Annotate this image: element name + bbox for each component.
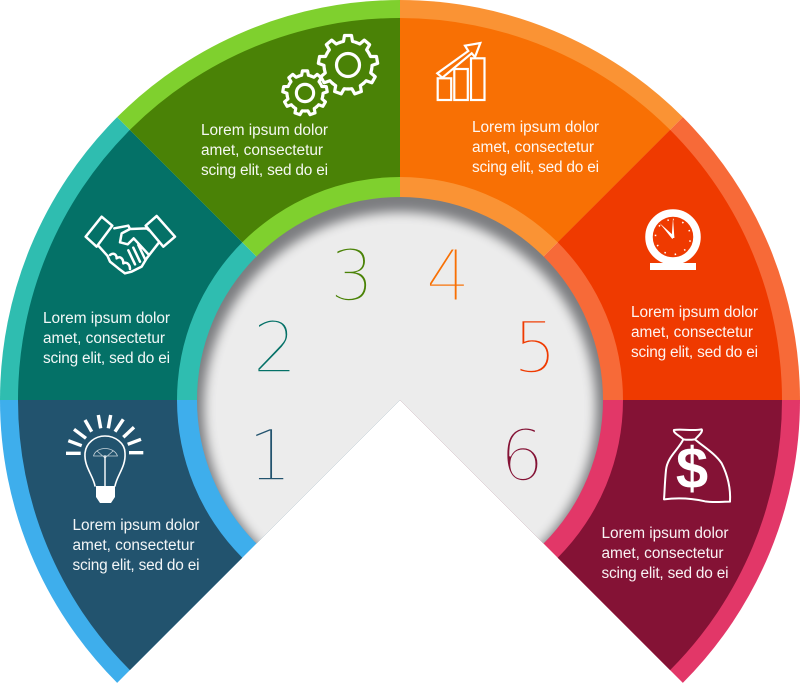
text: teal segment description	[43, 310, 170, 367]
panel 6: maroon segment	[400, 400, 800, 683]
center disc with inner shadow	[197, 197, 603, 544]
text: orange segment description: amet, consectetur	[472, 139, 594, 156]
text: blue segment description: amet, consectetur	[72, 537, 194, 554]
text: blue segment description	[72, 517, 200, 574]
text: red segment description: scing elit, sed do ei	[631, 344, 758, 361]
text: teal segment description: Lorem ipsum dolor	[43, 310, 170, 327]
icon: rising bar chart	[437, 43, 484, 100]
text: orange segment description: scing elit, sed do ei	[472, 159, 599, 176]
text: teal segment description: amet, consectetur	[43, 330, 165, 347]
text: teal segment description: scing elit, sed do ei	[43, 350, 170, 367]
number 2: 2	[253, 307, 297, 389]
numbers on center disc	[248, 235, 557, 497]
panel 5: red segment	[400, 117, 800, 400]
panel 2: teal segment	[0, 117, 400, 400]
number 1: 1	[248, 415, 292, 497]
icon: gears	[282, 36, 378, 116]
text: maroon segment description: scing elit, sed do ei	[602, 565, 728, 582]
text: green segment description: amet, consectetur	[201, 142, 323, 159]
text: maroon segment description: Lorem ipsum dolor	[602, 525, 728, 542]
icon: money bag: $	[676, 436, 708, 501]
panel 1: blue segment	[0, 400, 400, 683]
text: green segment description: Lorem ipsum dolor	[201, 122, 328, 139]
panel 4: orange segment	[400, 0, 683, 400]
icon: desk clock	[649, 213, 697, 270]
text: blue segment description: scing elit, sed do ei	[72, 557, 200, 574]
number 6: 6	[500, 415, 544, 497]
text: orange segment description: Lorem ipsum dolor	[472, 119, 599, 136]
panel 3: green segment	[117, 0, 400, 400]
number 3: 3	[330, 235, 374, 317]
icon: handshake	[86, 216, 175, 273]
number 5: 5	[513, 307, 557, 389]
text: green segment description: scing elit, sed do ei	[201, 162, 328, 179]
text: red segment description	[631, 304, 758, 361]
text: red segment description: Lorem ipsum dolor	[631, 304, 758, 321]
text: maroon segment description: amet, consectetur	[602, 545, 724, 562]
icon: light bulb	[66, 415, 143, 503]
text: orange segment description	[472, 119, 599, 176]
icon: money bag	[664, 429, 730, 502]
text: green segment description	[201, 122, 328, 179]
text: red segment description: amet, consectetur	[631, 324, 753, 341]
number 4: 4	[426, 235, 470, 317]
text: maroon segment description	[602, 525, 728, 582]
text: blue segment description: Lorem ipsum dolor	[72, 517, 200, 534]
